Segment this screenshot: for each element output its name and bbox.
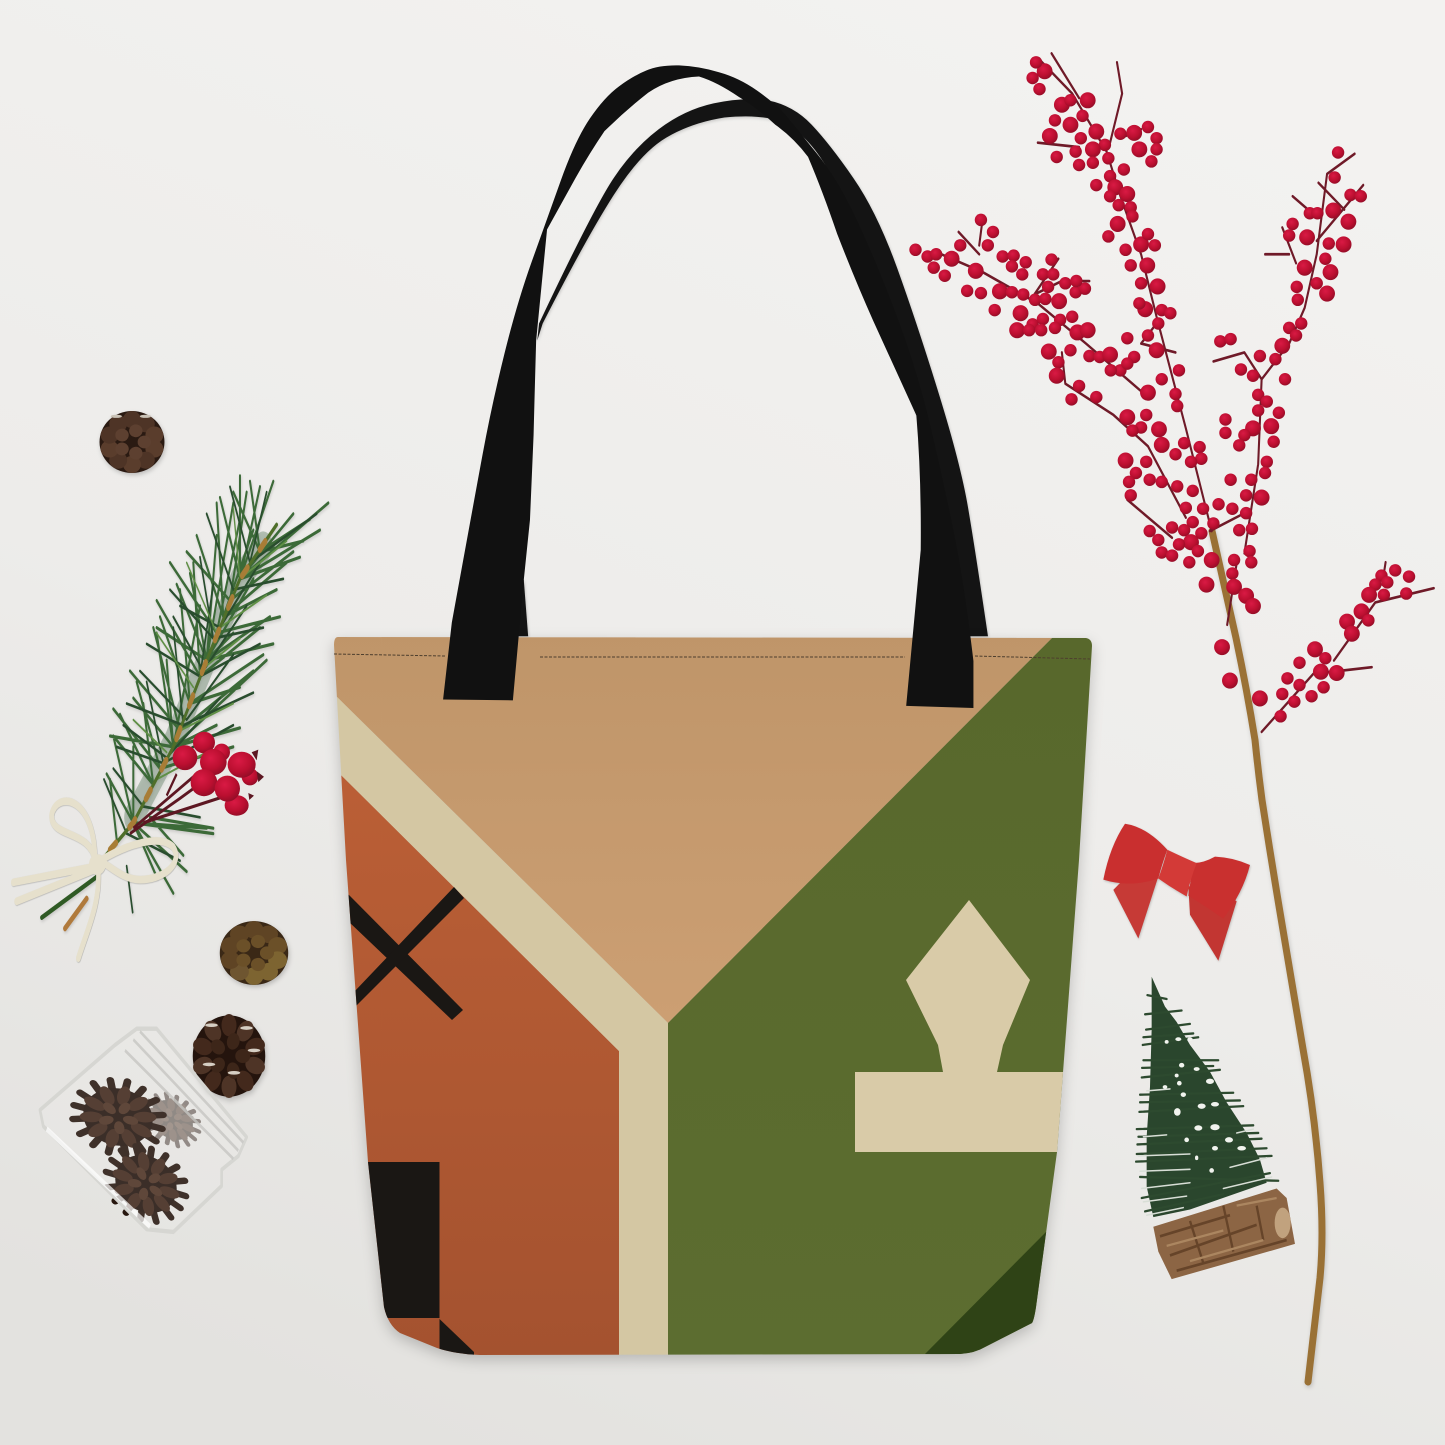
panel: orange left — [325, 760, 619, 1360]
back handle — [516, 99, 988, 636]
red ribbon bow — [1103, 824, 1250, 961]
black triangle — [440, 1319, 474, 1355]
black rectangle — [368, 1162, 440, 1318]
cream Y band — [325, 685, 668, 1360]
stitching — [334, 654, 1090, 659]
dark green corner — [925, 1232, 1046, 1354]
pine cone beside jar — [191, 1014, 267, 1098]
bottle brush tree — [1136, 977, 1295, 1279]
pine sprig — [42, 476, 328, 928]
berry branch: twigs — [941, 53, 1434, 732]
holly berries on sprig — [130, 732, 264, 834]
panel: olive green right — [668, 630, 1100, 1360]
twine bow — [13, 801, 176, 958]
black X mark — [340, 887, 464, 1020]
cream arrow emblem — [855, 900, 1070, 1152]
front handle — [443, 65, 973, 708]
berry branch: main stem — [1212, 531, 1322, 1382]
pine cone top — [98, 411, 166, 473]
panel: tan top — [325, 630, 1060, 1023]
tote bag body — [325, 630, 1100, 1360]
pine cone middle golden — [219, 921, 289, 985]
berry branch: berries — [909, 56, 1415, 723]
glass jar with pine cones — [40, 1029, 247, 1237]
wooden base — [1153, 1188, 1295, 1279]
